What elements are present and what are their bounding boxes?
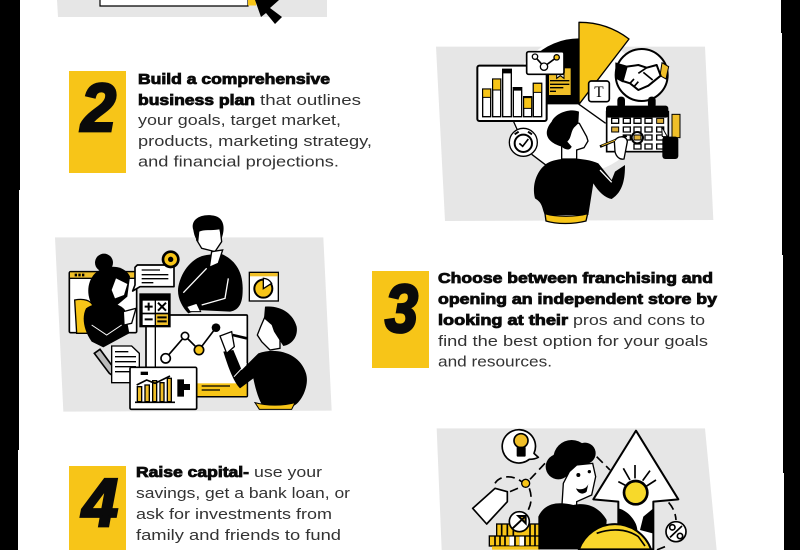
network card [527, 52, 564, 74]
step 4: text: Raise capital- [136, 465, 249, 481]
panel: business plan illustration [436, 22, 713, 223]
browser window [69, 272, 137, 333]
paper document [112, 346, 139, 383]
left black border [0, 0, 20, 550]
right black border [781, 0, 800, 550]
speech bubble [133, 265, 174, 291]
step 3: number block [372, 271, 429, 368]
step 3: text: opening an independent store by [438, 292, 717, 308]
icon: arrow with sun [593, 431, 678, 549]
panel: raise capital illustration [437, 428, 717, 550]
woman [84, 254, 136, 347]
step 3: text: Choose between franchising and [438, 271, 713, 287]
man with hand on chin [178, 215, 243, 313]
icon: price tag [473, 488, 507, 524]
coin stacks [489, 524, 540, 550]
person with pen [534, 110, 627, 223]
step 2: number block: 2 [79, 70, 116, 146]
panel: step 1 illustration remnant [57, 0, 327, 24]
calculator [139, 293, 171, 327]
step 2: text [138, 72, 372, 170]
step 3: text: and resources. [438, 354, 552, 370]
icon: compass [509, 512, 529, 532]
node [522, 479, 530, 487]
step 4: text: family and friends to fund [136, 527, 341, 544]
step 3: text: find the best option for your goals [438, 333, 708, 350]
whiteboard line chart [146, 315, 247, 397]
person [538, 440, 607, 549]
icon: clock [509, 128, 537, 156]
bar chart card [477, 66, 547, 121]
icon: T box: T [594, 84, 604, 101]
pencil [94, 349, 116, 377]
document [549, 68, 571, 95]
pie card [249, 272, 278, 301]
step 3: text [438, 271, 717, 370]
man at whiteboard [220, 306, 307, 409]
panel: team illustration [55, 215, 332, 412]
step 2: text: and financial projections. [138, 154, 339, 170]
step 4: text: savings, get a bank loan, or [136, 485, 350, 502]
big yellow coin [579, 524, 651, 549]
step 2: text: Build a comprehensive [138, 72, 330, 88]
icon: idea bubble [502, 430, 538, 463]
calendar [606, 97, 668, 152]
icon: percent [666, 522, 686, 542]
step 3: number block: 3 [385, 271, 418, 347]
step 2: text: products, marketing strategy, [138, 133, 372, 150]
step 2: text: your goals, target market, [138, 112, 341, 129]
icon: gear [162, 250, 180, 268]
bar chart card [130, 367, 197, 409]
step 2: text: that outlines [260, 92, 361, 109]
step 4: number block [69, 465, 126, 550]
icon: T box [589, 81, 609, 102]
step 4: text: ask for investments from [136, 506, 332, 523]
step 2: number block [69, 70, 126, 173]
step 4: text [136, 464, 350, 550]
step 3: text: pros and cons to [573, 312, 705, 329]
icon: cursor [255, 0, 282, 24]
step 3: text: looking at their [438, 313, 568, 329]
step 4: text: use your [254, 464, 322, 481]
pen holder [662, 114, 680, 159]
icon: handshake [615, 49, 669, 101]
step 2: text: business plan [138, 93, 255, 109]
step 4: number block: 4 [80, 465, 118, 541]
dashed connectors [495, 457, 676, 550]
